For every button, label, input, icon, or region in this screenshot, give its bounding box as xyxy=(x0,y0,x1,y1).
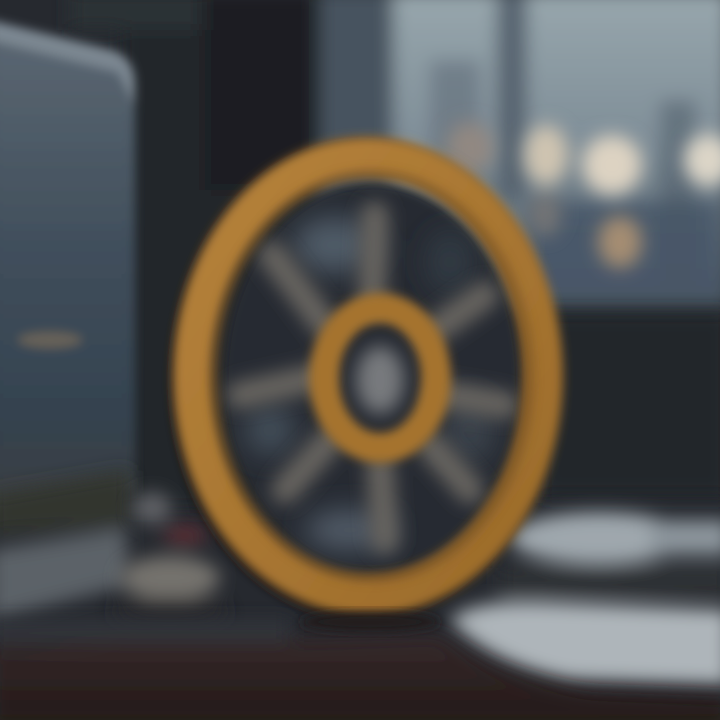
ship wheel xyxy=(184,154,543,606)
outer rim xyxy=(193,157,543,595)
window with city view xyxy=(318,0,720,310)
dark monitor on the right xyxy=(540,312,720,497)
hub centre xyxy=(356,346,404,414)
glass panel on the left xyxy=(0,20,135,515)
papers on the right xyxy=(450,512,720,685)
wheel base xyxy=(300,612,440,632)
rim shadow xyxy=(184,154,540,606)
window lights xyxy=(446,122,720,268)
spokes xyxy=(240,215,505,540)
desk clutter xyxy=(110,492,230,626)
rim inner shade xyxy=(214,174,530,578)
hub xyxy=(324,308,436,448)
desk surface xyxy=(0,620,720,720)
dark column behind wheel xyxy=(70,0,330,510)
base of the left panel xyxy=(0,470,130,620)
wheel interior shadow xyxy=(222,183,522,573)
interior highlights xyxy=(244,217,496,550)
